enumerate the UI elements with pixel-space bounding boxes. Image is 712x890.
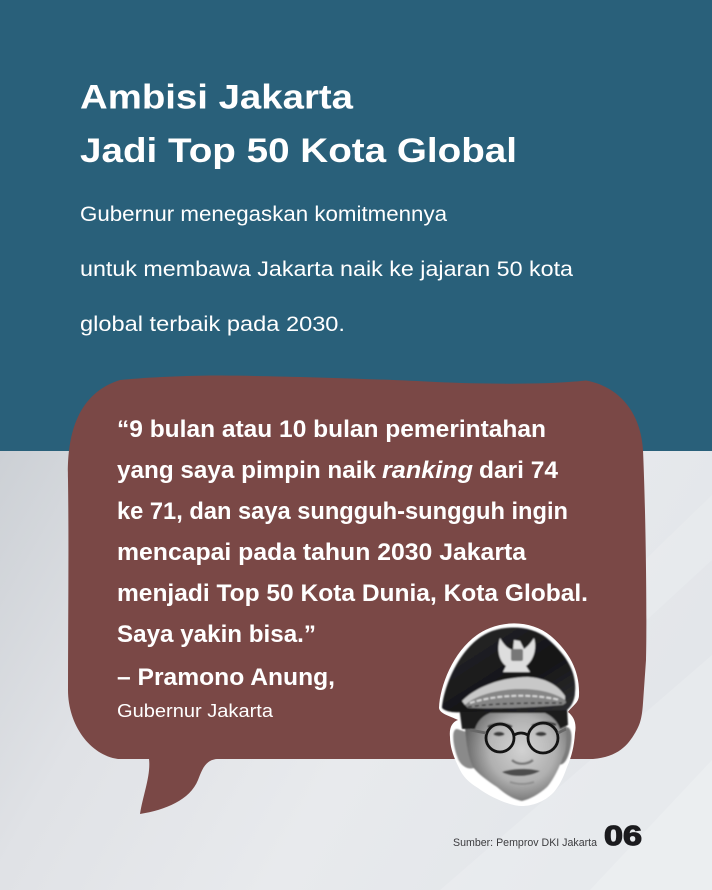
chin shade (510, 782, 534, 784)
glasses (470, 723, 566, 753)
quote text: ke 71, dan saya sungguh-sungguh ingin (117, 498, 568, 525)
page number: 06 (604, 820, 642, 851)
cap visor embroidery (465, 689, 566, 708)
source note: Sumber: Pemprov DKI Jakarta (453, 837, 598, 849)
quote text (117, 416, 588, 648)
quote text: mencapai pada tahun 2030 Jakarta (117, 539, 527, 566)
cap band (462, 677, 565, 705)
quote text: menjadi Top 50 Kota Dunia, Kota Global. (117, 580, 588, 607)
quote attribution: Gubernur Jakarta (117, 701, 274, 721)
title: Ambisi Jakarta (80, 78, 354, 116)
quote text: Saya yakin bisa.” (117, 621, 316, 648)
eyebrows (488, 723, 556, 727)
quote attribution (117, 664, 335, 721)
mouth (502, 769, 540, 776)
garuda emblem (498, 638, 535, 672)
quote text: yang saya pimpin naik (117, 457, 377, 484)
cap dome (442, 628, 575, 712)
quote attribution: – Pramono Anung, (117, 664, 335, 691)
nose shadow (512, 760, 533, 764)
background: light grey lower section (0, 451, 712, 890)
intro paragraph: global terbaik pada 2030. (80, 313, 345, 336)
hair (459, 706, 568, 729)
eyes (494, 732, 546, 736)
ears (453, 729, 476, 768)
background: teal header section (0, 0, 712, 451)
sticker outline (439, 623, 579, 806)
intro paragraph (80, 203, 573, 336)
quote text: ranking (382, 457, 473, 484)
quote text: “9 bulan atau 10 bulan pemerintahan (117, 416, 546, 443)
title (80, 78, 517, 170)
speech bubble (68, 376, 646, 814)
title: Jadi Top 50 Kota Global (80, 132, 517, 170)
intro paragraph: Gubernur menegaskan komitmennya (80, 203, 447, 226)
intro paragraph: untuk membawa Jakarta naik ke jajaran 50 kota (80, 258, 573, 281)
face (464, 708, 566, 801)
quote text: dari 74 (479, 457, 559, 484)
portrait: Pramono Anung (439, 623, 579, 806)
